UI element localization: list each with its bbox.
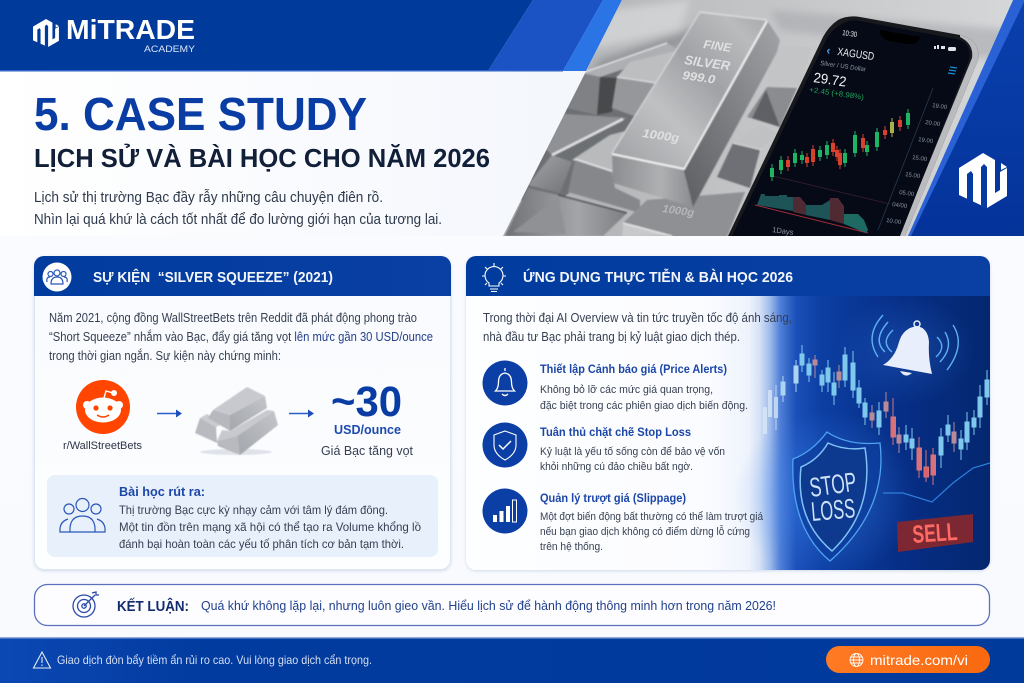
back blocks (521, 69, 634, 200)
panel body text: Năm 2021, cộng đồng WallStreetBets trên Reddit đã phát động phong trào (49, 311, 417, 325)
icon: light bulb (482, 263, 506, 292)
bar engraving: 1000g (662, 203, 695, 219)
icon: Mitrade mark on corner (959, 153, 1007, 209)
item text: trên hệ thống. (540, 541, 603, 553)
icon: stop loss shield: STOP (808, 467, 858, 503)
sell badge (897, 514, 973, 552)
disclaimer: Giao dịch đòn bẩy tiềm ẩn rủi ro cao. Vui lòng giao dịch cẩn trọng. (57, 653, 372, 667)
bar engraving: 999.0 (682, 68, 717, 87)
lesson text (119, 503, 421, 551)
item heading: Quản lý trượt giá (Slippage) (540, 491, 686, 505)
conclusion label: KẾT LUẬN: (117, 597, 189, 615)
panel header (466, 256, 990, 296)
icon: reddit (76, 380, 130, 434)
hero photo: silver bars and trading phone (500, 0, 1020, 237)
website button (826, 646, 990, 673)
subtitle: LỊCH SỬ VÀ BÀI HỌC CHO NĂM 2026 (34, 142, 490, 173)
item text: Một đợt biến động bất thường có thể làm trượt giá (540, 511, 764, 523)
item text: nếu bạn giao dịch không có điểm dừng lỗ cứng (540, 525, 750, 538)
panel: silver squeeze event (34, 256, 451, 570)
item: slippage (482, 488, 764, 553)
item text (540, 511, 764, 553)
phone (728, 16, 978, 237)
icon: target (73, 592, 99, 617)
website button: mitrade.com/vi (870, 652, 968, 668)
icon: ringing bell (872, 315, 958, 376)
panel body text: trong thời gian ngắn. Sự kiện này chứng minh: (49, 348, 281, 363)
lesson box (47, 475, 438, 557)
title: 5. CASE STUDY (34, 88, 367, 140)
intro text: Nhìn lại quá khứ là cách tốt nhất để đo lường giới hạn của tương lai. (34, 212, 442, 228)
lesson heading: Bài học rút ra: (119, 484, 205, 499)
axis labels: 15.00 (905, 172, 921, 180)
item heading: Tuân thủ chặt chẽ Stop Loss (540, 425, 691, 439)
bar engraving (642, 37, 733, 219)
block F (622, 192, 745, 237)
axis labels: 05.00 (899, 190, 915, 198)
price callout (321, 378, 414, 458)
upper right block (767, 45, 812, 87)
icon: stop loss shield: LOSS (810, 493, 856, 527)
candlesticks (763, 345, 989, 485)
axis labels: 10.00 (886, 218, 902, 226)
block D (572, 130, 625, 168)
block A top (582, 43, 680, 77)
lesson text: Một tin đồn trên mạng xã hội có thể tạo ra Volume khổng lồ (119, 520, 421, 534)
panel heading: SỰ KIỆN “SILVER SQUEEZE” (2021) (93, 268, 333, 286)
price callout: ~30 (331, 378, 402, 426)
item heading: Thiết lập Cảnh báo giá (Price Alerts) (540, 362, 727, 376)
academy label: ACADEMY (144, 44, 196, 55)
item text: Kỷ luật là yếu tố sống còn để bảo vệ vốn (540, 446, 725, 458)
conclusion text: Quá khứ không lặp lại, nhưng luôn gieo vần. Hiểu lịch sử để hành động thông minh hơn trong năm 2026! (201, 598, 776, 613)
arrow: reddit to silver (157, 410, 182, 418)
axis labels: 19.00 (932, 103, 948, 111)
icon: community group (42, 262, 72, 292)
intro text: Lịch sử thị trường Bạc đầy rẫy những câu chuyện điên rồ. (34, 189, 383, 206)
panel header (34, 256, 451, 296)
plate E (505, 188, 627, 236)
item text (540, 446, 725, 473)
block A front (567, 73, 600, 115)
intro text: Trong thời đại AI Overview và tin tức truyền tốc độ ánh sáng, (483, 311, 792, 325)
lesson text: Thị trường Bạc cực kỳ nhạy cảm với tâm lý đám đông. (119, 503, 388, 517)
icon: bell circle (482, 360, 528, 406)
trend line (883, 463, 990, 502)
axis labels (772, 103, 948, 237)
sell badge: SELL (911, 518, 958, 549)
panel body text (49, 311, 433, 363)
phone header text: 10:30 (842, 28, 858, 39)
item: stop loss (482, 422, 725, 473)
intro text (483, 311, 792, 344)
arrow: silver to price (289, 410, 314, 418)
axis labels: 19.00 (918, 137, 934, 145)
intro text (34, 189, 442, 228)
hero background (0, 0, 1024, 236)
panel: practical lessons 2026 (466, 256, 990, 580)
main silver bar (612, 12, 767, 170)
reddit label: r/WallStreetBets (63, 440, 142, 452)
icon: shield circle (482, 422, 528, 468)
item text (540, 384, 748, 412)
axis labels: 20.00 (925, 120, 941, 128)
axis labels: 1Days (772, 225, 794, 237)
bar engraving: SILVER (684, 52, 732, 73)
intro text: nhà đầu tư Bạc phải trang bị kỷ luật giao dịch thép. (483, 330, 740, 344)
block B (617, 52, 674, 82)
phone header text: 29.72 (813, 69, 848, 90)
price callout: USD/ounce (334, 422, 401, 437)
bar engraving: 1000g (642, 126, 681, 145)
lesson text: đánh bại hoàn toàn các yếu tố phân tích cơ bản tạm thời. (119, 537, 404, 551)
icon: stop loss shield (793, 432, 881, 561)
icon: silver bar stack (195, 387, 278, 455)
panel heading: ỨNG DỤNG THỰC TIỄN & BÀI HỌC 2026 (523, 268, 793, 286)
panel body text: “Short Squeeze” nhắm vào Bạc, đẩy giá tăng vọt lên mức gần 30 USD/ounce (49, 329, 433, 344)
plate C (545, 113, 627, 155)
phone header text: ‹ (826, 43, 831, 58)
phone volume (757, 194, 868, 233)
block G behind bar (733, 125, 778, 150)
axis labels: 04/00 (892, 202, 908, 210)
phone status and menu (934, 45, 956, 51)
illustration: stop loss market scene (466, 295, 990, 580)
item text: đặc biệt trong các phiên giao dịch biến động. (540, 400, 748, 412)
phone header text: Silver / US Dollar (820, 60, 867, 73)
axis labels: 15.00 (912, 155, 928, 163)
footer (0, 637, 1024, 683)
icon: globe (850, 654, 863, 666)
conclusion banner (34, 584, 990, 626)
item text: Không bỏ lỡ các mức giá quan trọng, (540, 384, 713, 396)
phone header text: XAGUSD (837, 46, 875, 63)
logo: Mitrade Academy (33, 14, 196, 55)
phone header text (809, 28, 875, 102)
price callout: Giá Bạc tăng vọt (321, 444, 414, 458)
item: price alerts (482, 360, 748, 412)
item text: khỏi những cú đảo chiều bất ngờ. (540, 461, 693, 473)
icon: bars circle (482, 488, 528, 534)
wordmark: MiTRADE (66, 14, 195, 45)
icon: Mitrade mark (33, 19, 59, 48)
phone header text: +2.45 (+8.98%) (809, 85, 865, 102)
bar engraving: FINE (703, 37, 733, 55)
icon: crowd (60, 498, 105, 532)
phone candles (770, 109, 910, 181)
icon: warning (34, 652, 50, 668)
